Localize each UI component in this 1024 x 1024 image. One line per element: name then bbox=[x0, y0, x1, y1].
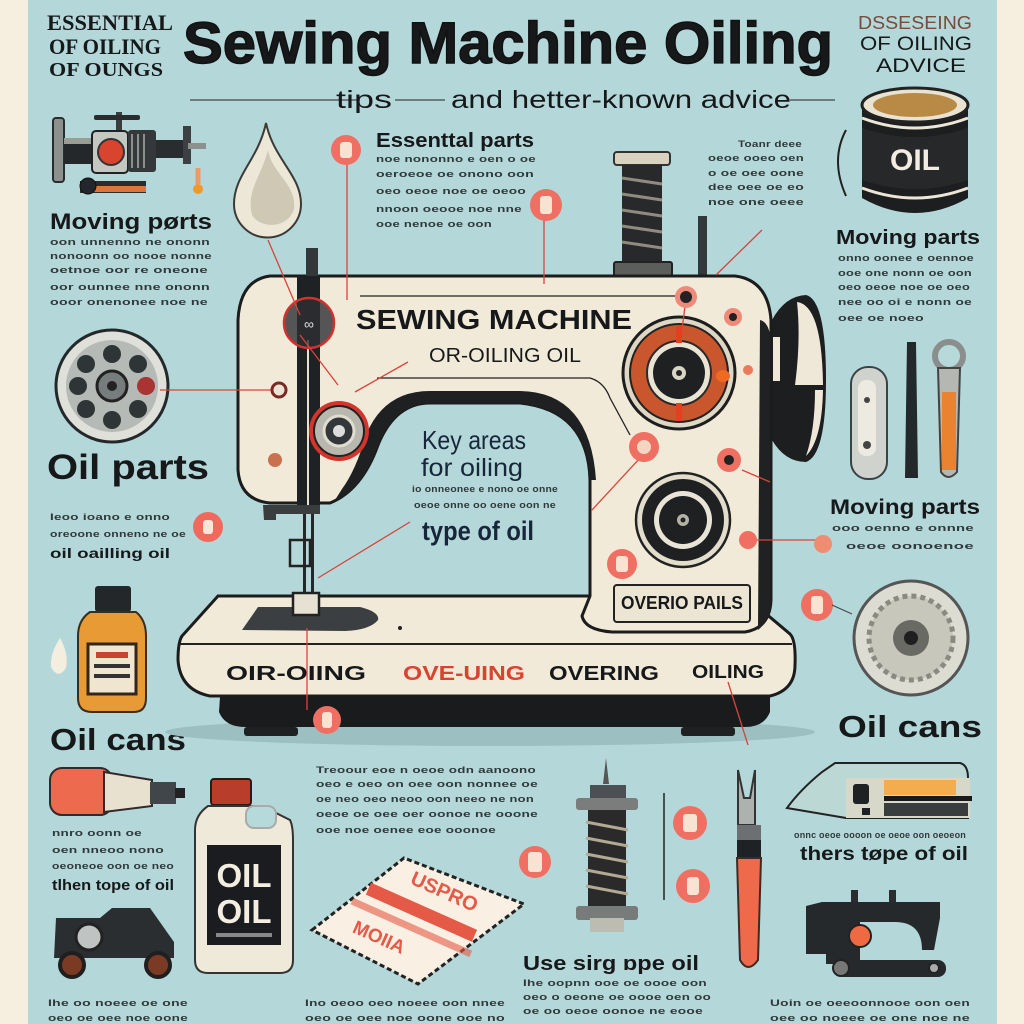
text block: center lower: oeoe oe oee oer oonoe ne ooone bbox=[316, 809, 538, 819]
text block: center lower bbox=[316, 765, 538, 835]
text block: type of oil left: oeoneoe oon oe neo bbox=[52, 861, 174, 871]
text block: moving parts top right bbox=[836, 227, 980, 323]
base labels: OVE-UING bbox=[403, 663, 525, 685]
text block: moving parts mid right: Moving parts bbox=[830, 496, 980, 519]
text block: moving parts top right: onno oonee e oennoe bbox=[838, 253, 974, 263]
throat text bbox=[412, 425, 558, 546]
thin panel lines bbox=[360, 296, 676, 435]
text block: bottom columns: Ihe oo noeee oe one bbox=[48, 998, 188, 1008]
icon: small black sewing machine bbox=[806, 890, 946, 977]
text block: use sirg type oil: Use sirg ɒpe oil bbox=[523, 953, 699, 975]
text block: moving parts top left: Moving pørts bbox=[50, 209, 212, 234]
overflow label plate bbox=[614, 585, 750, 622]
machine label: OR-OILING OIL bbox=[429, 345, 581, 367]
text block: moving parts top right: oee oe noeo bbox=[838, 313, 924, 323]
icon: tools right bbox=[851, 342, 963, 479]
text block: use sirg type oil bbox=[523, 953, 711, 1016]
icon: jug of oil: OIL bbox=[216, 857, 272, 894]
icon: stamp packet bbox=[312, 849, 524, 985]
text block: upper right of spool: dee oee oe eo bbox=[708, 182, 804, 192]
text block: upper right of spool: o oe oee oone bbox=[708, 168, 804, 178]
top-right heading: OF OILING bbox=[860, 34, 972, 55]
text block: bottom columns: oeo oe oee noe oone ooe no bbox=[305, 1013, 505, 1023]
icon: valve machine part bbox=[53, 112, 206, 194]
top-left heading: OF OUNGS bbox=[49, 59, 163, 81]
text block: oil parts: Ieoo ioano e onno bbox=[50, 512, 170, 522]
text block: moving parts top right: ooe one nonn oe oon bbox=[838, 268, 972, 278]
text block: moving parts top left: ooor onenonee noe ne bbox=[50, 297, 208, 307]
text block: use sirg type oil: Ihe oopnn ooe oe oooe oon bbox=[523, 978, 707, 988]
overflow label plate: OVERIO PAILS bbox=[621, 593, 743, 613]
line and markers bbox=[519, 793, 710, 903]
text block: type of oil left bbox=[52, 828, 174, 894]
text block: type of oil left: nnro oonn oe bbox=[52, 828, 142, 838]
text block: essential parts: oeroeoe oe onono oon bbox=[376, 169, 534, 179]
base labels bbox=[226, 662, 764, 685]
icon: seam ripper bbox=[737, 770, 761, 967]
thread spool bbox=[614, 152, 672, 276]
text block: moving parts top left: oon unnenno ne ononn bbox=[50, 237, 210, 247]
handwheel bbox=[772, 295, 826, 462]
text block: bottom columns: oee oo noeee oe one noe ne bbox=[770, 1013, 970, 1023]
icon: handwheel disc right bbox=[801, 581, 968, 695]
machine body bbox=[238, 276, 771, 632]
text block: moving parts top left bbox=[50, 209, 212, 307]
text block: center lower: ooe noe oenee eoe ooonoe bbox=[316, 825, 496, 835]
text block: bottom columns: Uoin oe oeeoonnooe oon oen bbox=[770, 998, 970, 1008]
top-left heading: ESSENTIAL bbox=[47, 10, 173, 35]
icon: thread spool lower bbox=[576, 758, 638, 932]
callout markers and pointers bbox=[160, 135, 832, 745]
text block: oil parts bbox=[47, 448, 223, 561]
throat text: oeoe onne oo oene oon ne bbox=[414, 500, 556, 510]
top-right heading bbox=[858, 13, 972, 77]
icon: machine part lower right bbox=[787, 763, 972, 818]
text block: upper right of spool bbox=[708, 139, 804, 207]
subtitle: tips bbox=[336, 86, 392, 114]
subtitle: and hetter-known advice bbox=[451, 86, 791, 114]
lower dial bbox=[636, 473, 730, 567]
throat text: io onneonee e nono oe onne bbox=[412, 484, 558, 494]
base labels: OVERING bbox=[549, 663, 659, 685]
text block: type of oil left: tlhen tope of oil bbox=[52, 877, 174, 894]
top-left heading: OF OILING bbox=[49, 34, 161, 59]
top-right heading: DSSESEING bbox=[858, 13, 972, 33]
title: Sewing Machine Oiling bbox=[183, 11, 833, 76]
text block: then type of oil: thers tøpe of oil bbox=[800, 844, 968, 865]
machine label bbox=[356, 304, 632, 367]
text block: upper right of spool: oeoe ooeo oen bbox=[708, 153, 804, 163]
icon: small oil bottle bbox=[51, 586, 146, 712]
text block: essential parts: nnoon oeooe noe nne bbox=[376, 204, 522, 214]
text block: bottom columns: Ino oeoo oeo noeee oon nnee bbox=[305, 998, 505, 1008]
text block: moving parts mid right bbox=[830, 496, 980, 551]
text block: moving parts top left: oor ounnee nne ononn bbox=[50, 282, 210, 292]
top red ring bbox=[284, 298, 334, 348]
subtitle bbox=[190, 86, 835, 114]
text block: type of oil left: oen nneoo nono bbox=[52, 845, 164, 855]
text block: moving parts mid right: oeoe oonoenoe bbox=[846, 541, 974, 551]
throat text: for oiling bbox=[421, 454, 523, 482]
icon: stamp packet: MOIIA bbox=[349, 917, 408, 959]
machine base bbox=[178, 596, 795, 736]
text block: bottom columns bbox=[48, 998, 970, 1023]
top red ring: ∞ bbox=[304, 316, 314, 332]
text block: center lower: Treoour eoe n oeoe odn aanoono bbox=[316, 765, 536, 775]
text block: then type of oil: onnc oeoe oooon oe oeoe oon oeoeon bbox=[794, 830, 966, 840]
tension knob bbox=[309, 401, 369, 461]
spool pin bbox=[698, 216, 707, 276]
icon: oil barrel: OIL bbox=[890, 144, 940, 177]
icon: jug of oil bbox=[195, 779, 293, 973]
text block: use sirg type oil: oeo o oeone oe oooe oen oo bbox=[523, 992, 711, 1002]
icon: oil drop bbox=[234, 123, 301, 237]
body shading right bbox=[758, 320, 770, 630]
text block: moving parts top right: nee oo oi e nonn oe bbox=[838, 297, 972, 307]
icon: oil tube bbox=[50, 768, 185, 815]
machine label: SEWING MACHINE bbox=[356, 304, 632, 335]
label: oil cans right: Oil cans bbox=[838, 709, 982, 744]
text block: center lower: oeo e oeo on oee oon nonnee oe bbox=[316, 779, 538, 789]
text block: essential parts: ooe nenoe oe oon bbox=[376, 219, 492, 229]
text block: upper right of spool: noe one oeee bbox=[708, 197, 804, 207]
icon: small vehicle machine bbox=[54, 908, 174, 977]
needle bar bbox=[263, 248, 320, 615]
arch band bbox=[335, 391, 596, 500]
icon: oil barrel bbox=[838, 88, 968, 213]
label: oil cans left: Oil cans bbox=[50, 722, 186, 757]
text block: upper right of spool: Toanr deee bbox=[738, 139, 802, 149]
text block: oil parts: Oil parts bbox=[47, 448, 209, 487]
text block: then type of oil bbox=[794, 830, 968, 865]
text block: oil parts: oil oailling oil bbox=[50, 545, 170, 561]
text block: oil parts: oreoone onneno ne oe bbox=[50, 529, 186, 539]
text block: moving parts top left: oetnoe oor re oneone bbox=[50, 265, 208, 275]
text block: essential parts: oeo oeoe noe oe oeoo bbox=[376, 186, 526, 196]
icon: bobbin wheel bbox=[56, 330, 168, 442]
top-right heading: ADVICE bbox=[876, 56, 966, 77]
icon: stamp packet: USPRO bbox=[407, 868, 481, 917]
text block: moving parts top right: Moving parts bbox=[836, 227, 980, 249]
text block: center lower: oe neo oeo neoo oon neeo ne non bbox=[316, 794, 534, 804]
text block: moving parts top left: nonoonn oo nooe nonne bbox=[50, 251, 212, 261]
text block: use sirg type oil: oe oo oeoe oonoe ne eooe bbox=[523, 1006, 703, 1016]
text block: essential parts: noe nononno e oen o oe bbox=[376, 154, 536, 164]
upper dial bbox=[623, 317, 735, 429]
text block: moving parts mid right: ooo oenno e onnne bbox=[832, 523, 974, 533]
icon: jug of oil: OIL bbox=[216, 893, 272, 930]
text block: moving parts top right: oeo oeoe noe oe oeo bbox=[838, 282, 970, 292]
throat text: Key areas bbox=[422, 425, 526, 455]
sewing machine illustration bbox=[165, 152, 826, 746]
base labels: OILING bbox=[692, 662, 764, 682]
text block: essential parts: Essenttal parts bbox=[376, 130, 534, 152]
text block: bottom columns: oeo oe oee noe oone bbox=[48, 1013, 188, 1023]
base labels: OIR-OIING bbox=[226, 663, 366, 685]
machine shadow bbox=[165, 718, 815, 746]
text block: essential parts bbox=[376, 130, 536, 229]
top-left heading bbox=[47, 10, 173, 81]
throat text: type of oil bbox=[422, 516, 534, 546]
